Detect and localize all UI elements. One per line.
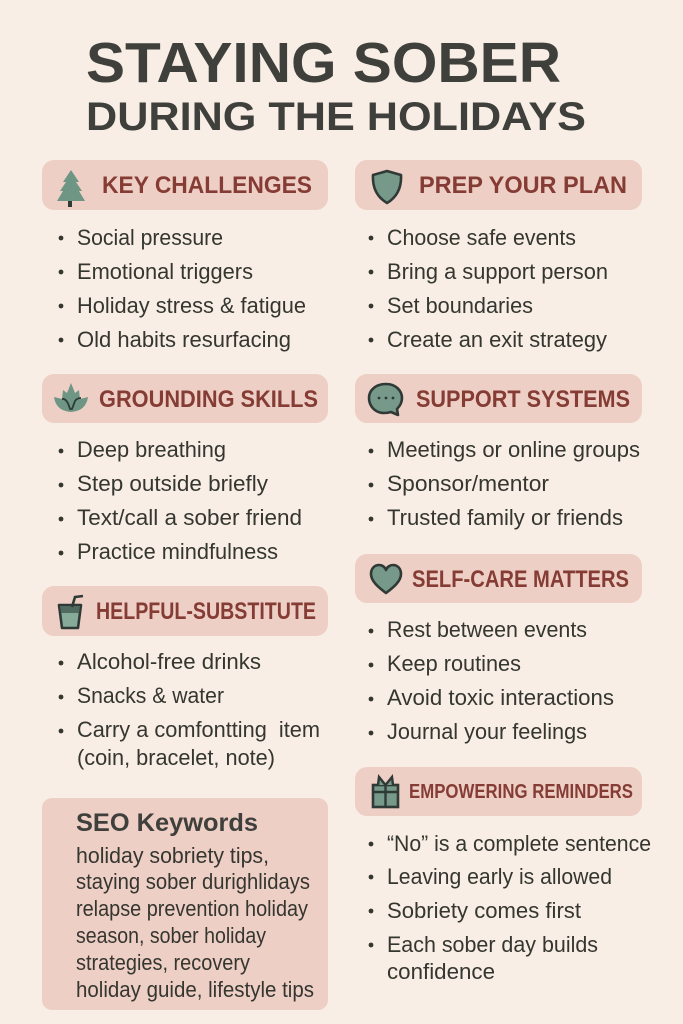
icon: gift box <box>373 777 398 807</box>
list: key challenges: Emotional triggers <box>77 259 253 284</box>
list: self-care matters: Keep routines <box>387 651 521 676</box>
heading: empowering reminders <box>355 767 642 816</box>
list: helpful substitute: (coin, bracelet, note) <box>77 745 275 770</box>
list: helpful substitute: Alcohol-free drinks <box>77 649 261 674</box>
list: grounding skills: Step outside briefly <box>77 471 268 496</box>
panel: seo keywords <box>42 798 328 1010</box>
heading: grounding skills: GROUNDING SKILLS <box>99 386 318 413</box>
panel: key challenges <box>42 160 328 352</box>
list: self-care matters <box>369 617 614 744</box>
list: support systems: Sponsor/mentor <box>387 471 549 496</box>
heading: key challenges: KEY CHALLENGES <box>102 172 312 199</box>
list: helpful substitute: Snacks & water <box>77 683 224 708</box>
icon: pine tree <box>57 170 85 207</box>
heading: seo keywords: SEO Keywords <box>76 809 258 837</box>
list: key challenges: Holiday stress & fatigue <box>77 293 306 318</box>
list: key challenges: Old habits resurfacing <box>77 327 291 352</box>
list: prep your plan: Choose safe events <box>387 225 576 250</box>
title: DURING THE HOLIDAYS <box>86 95 586 139</box>
panel: grounding skills <box>42 374 328 564</box>
panel: prep your plan <box>355 160 642 352</box>
list: empowering reminders: Each sober day builds <box>387 932 598 957</box>
icon: drink with straw <box>59 596 83 628</box>
heading: key challenges <box>42 160 328 210</box>
text block: keywords: holiday guide, lifestyle tips <box>76 977 314 1002</box>
list: helpful substitute <box>59 649 320 770</box>
list: empowering reminders: confidence <box>387 959 495 984</box>
list: prep your plan: Set boundaries <box>387 293 533 318</box>
heading: support systems <box>355 374 642 423</box>
panel: support systems <box>355 374 642 530</box>
list: self-care matters: Journal your feelings <box>387 719 587 744</box>
heading: prep your plan: PREP YOUR PLAN <box>419 172 627 199</box>
heading: support systems: SUPPORT SYSTEMS <box>416 386 630 413</box>
text block: keywords: strategies, recovery <box>76 950 250 975</box>
list: empowering reminders: Leaving early is allowed <box>387 864 612 889</box>
list: empowering reminders <box>369 831 651 984</box>
list: grounding skills: Deep breathing <box>77 437 226 462</box>
icon: lotus <box>54 383 88 412</box>
panel: self-care matters <box>355 554 642 744</box>
panel: empowering reminders <box>355 767 651 984</box>
list: prep your plan: Bring a support person <box>387 259 608 284</box>
text block: keywords: holiday sobriety tips, <box>76 843 269 868</box>
text block: keywords: relapse prevention holiday <box>76 896 308 921</box>
list: grounding skills: Practice mindfulness <box>77 539 278 564</box>
list: self-care matters: Avoid toxic interactions <box>387 685 614 710</box>
heading: prep your plan <box>355 160 642 210</box>
icon: speech bubble <box>369 384 402 415</box>
title: STAYING SOBER <box>86 31 561 95</box>
list: grounding skills <box>59 437 302 564</box>
list: support systems <box>369 437 640 530</box>
list: self-care matters: Rest between events <box>387 617 587 642</box>
text block: keywords <box>76 843 314 1002</box>
title <box>86 31 586 139</box>
list: prep your plan <box>369 225 608 352</box>
list: key challenges <box>59 225 306 352</box>
heading: empowering reminders: EMPOWERING REMINDERS <box>409 781 633 803</box>
heading: self-care matters <box>355 554 642 603</box>
text block: keywords: staying sober durighlidays <box>76 869 310 894</box>
text block: keywords: season, sober holiday <box>76 923 266 948</box>
heading: helpful substitute <box>42 586 328 636</box>
list: prep your plan: Create an exit strategy <box>387 327 607 352</box>
list: grounding skills: Text/call a sober friend <box>77 505 302 530</box>
heading: helpful substitute: HELPFUL-SUBSTITUTE <box>96 598 316 625</box>
list: empowering reminders: “No” is a complete sentence <box>387 831 651 856</box>
list: helpful substitute: Carry a comfontting item <box>77 717 320 742</box>
heading: grounding skills <box>42 374 328 423</box>
list: key challenges: Social pressure <box>77 225 223 250</box>
heading: self-care matters: SELF-CARE MATTERS <box>412 566 629 593</box>
icon: shield <box>373 171 401 203</box>
list: empowering reminders: Sobriety comes first <box>387 898 581 923</box>
list: support systems: Meetings or online groups <box>387 437 640 462</box>
list: support systems: Trusted family or friends <box>387 505 623 530</box>
icon: heart <box>371 565 401 593</box>
panel: helpful substitute <box>42 586 328 770</box>
